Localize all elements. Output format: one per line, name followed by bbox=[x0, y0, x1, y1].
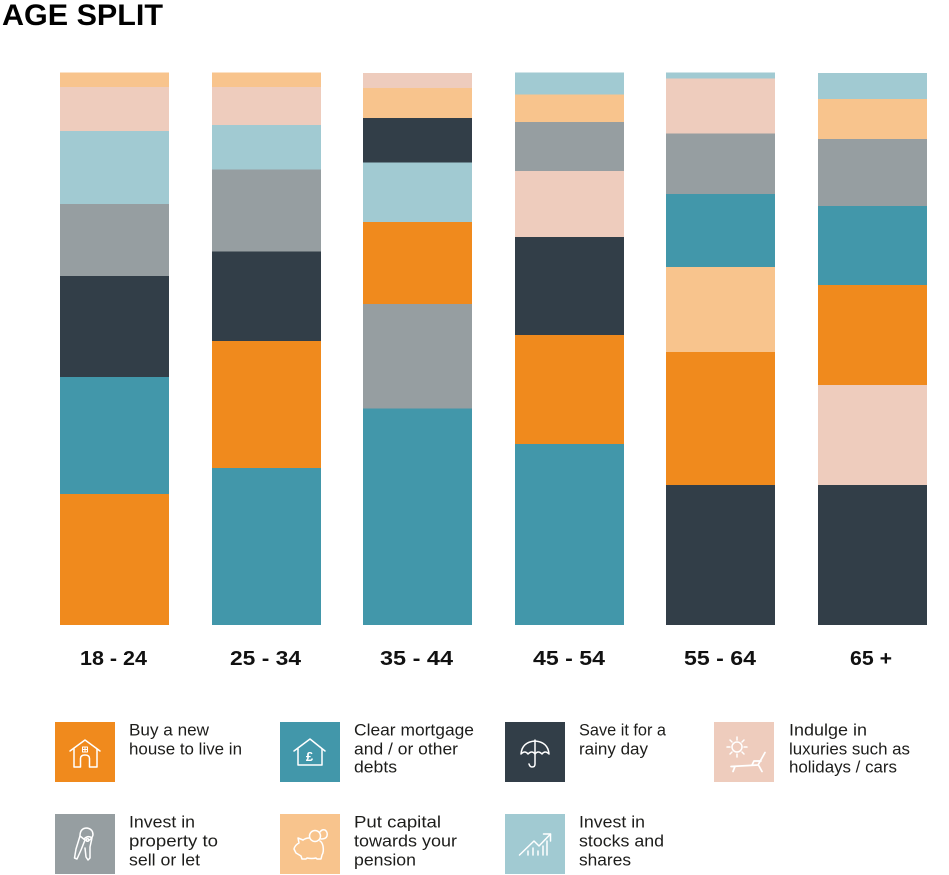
age labels bbox=[80, 648, 892, 670]
age labels: 35 - 44 bbox=[380, 648, 454, 670]
bar: 18 - 24 bbox=[60, 72, 169, 625]
legend item: put capital towards pension: Put capital bbox=[354, 814, 441, 832]
legend item: indulge in luxuries: luxuries such as bbox=[789, 740, 910, 758]
legend item: invest in property: property to bbox=[129, 832, 218, 850]
legend item: indulge in luxuries: Indulge in bbox=[789, 722, 867, 740]
legend item: put capital towards pension bbox=[280, 814, 458, 874]
legend item: buy a new house: Buy a new bbox=[129, 722, 209, 740]
legend item: indulge in luxuries: holidays / cars bbox=[789, 758, 897, 776]
icon: keys bbox=[74, 828, 93, 860]
legend item: save for a rainy day bbox=[505, 722, 667, 782]
legend item: clear mortgage: debts bbox=[354, 758, 397, 776]
legend item: invest in stocks and shares: shares bbox=[579, 852, 631, 870]
legend bbox=[55, 722, 910, 874]
legend item: invest in property bbox=[55, 814, 218, 874]
legend item: clear mortgage: and / or other bbox=[354, 740, 459, 758]
legend item: save for a rainy day: Save it for a bbox=[579, 722, 667, 740]
stacked bar chart bbox=[60, 72, 927, 625]
legend item: clear mortgage bbox=[280, 722, 474, 782]
age labels: 25 - 34 bbox=[230, 648, 302, 670]
legend item: put capital towards pension: pension bbox=[354, 852, 416, 870]
icon: house bbox=[70, 740, 100, 767]
legend item: invest in stocks and shares bbox=[505, 814, 664, 874]
bar: 55 - 64 bbox=[666, 72, 775, 625]
icon: house with pound sign bbox=[294, 739, 325, 765]
age labels: 65 + bbox=[850, 648, 892, 670]
icon: rising chart arrow bbox=[520, 834, 550, 855]
bar: 25 - 34 bbox=[212, 72, 321, 625]
bar: 35 - 44 bbox=[363, 73, 472, 625]
legend item: clear mortgage: Clear mortgage bbox=[354, 722, 474, 740]
age labels: 45 - 54 bbox=[533, 648, 606, 670]
legend item: invest in stocks and shares: Invest in bbox=[579, 814, 645, 832]
legend item: invest in property: Invest in bbox=[129, 814, 195, 832]
bar: 45 - 54 bbox=[515, 72, 624, 625]
legend item: put capital towards pension: towards your bbox=[354, 832, 458, 850]
legend item: buy a new house bbox=[55, 722, 242, 782]
age labels: 18 - 24 bbox=[80, 648, 148, 670]
icon: sun and lounger bbox=[727, 737, 765, 772]
bar: 65 + bbox=[818, 73, 927, 625]
icon: umbrella bbox=[521, 740, 549, 767]
legend item: invest in stocks and shares: stocks and bbox=[579, 832, 664, 850]
legend item: buy a new house: house to live in bbox=[129, 740, 242, 758]
icon: piggy bank with coins bbox=[294, 830, 327, 859]
legend item: invest in property: sell or let bbox=[129, 852, 200, 870]
legend item: indulge in luxuries bbox=[714, 722, 910, 782]
age labels: 55 - 64 bbox=[684, 648, 757, 670]
icon: house with pound sign: £ bbox=[306, 749, 314, 764]
legend item: save for a rainy day: rainy day bbox=[579, 740, 649, 758]
